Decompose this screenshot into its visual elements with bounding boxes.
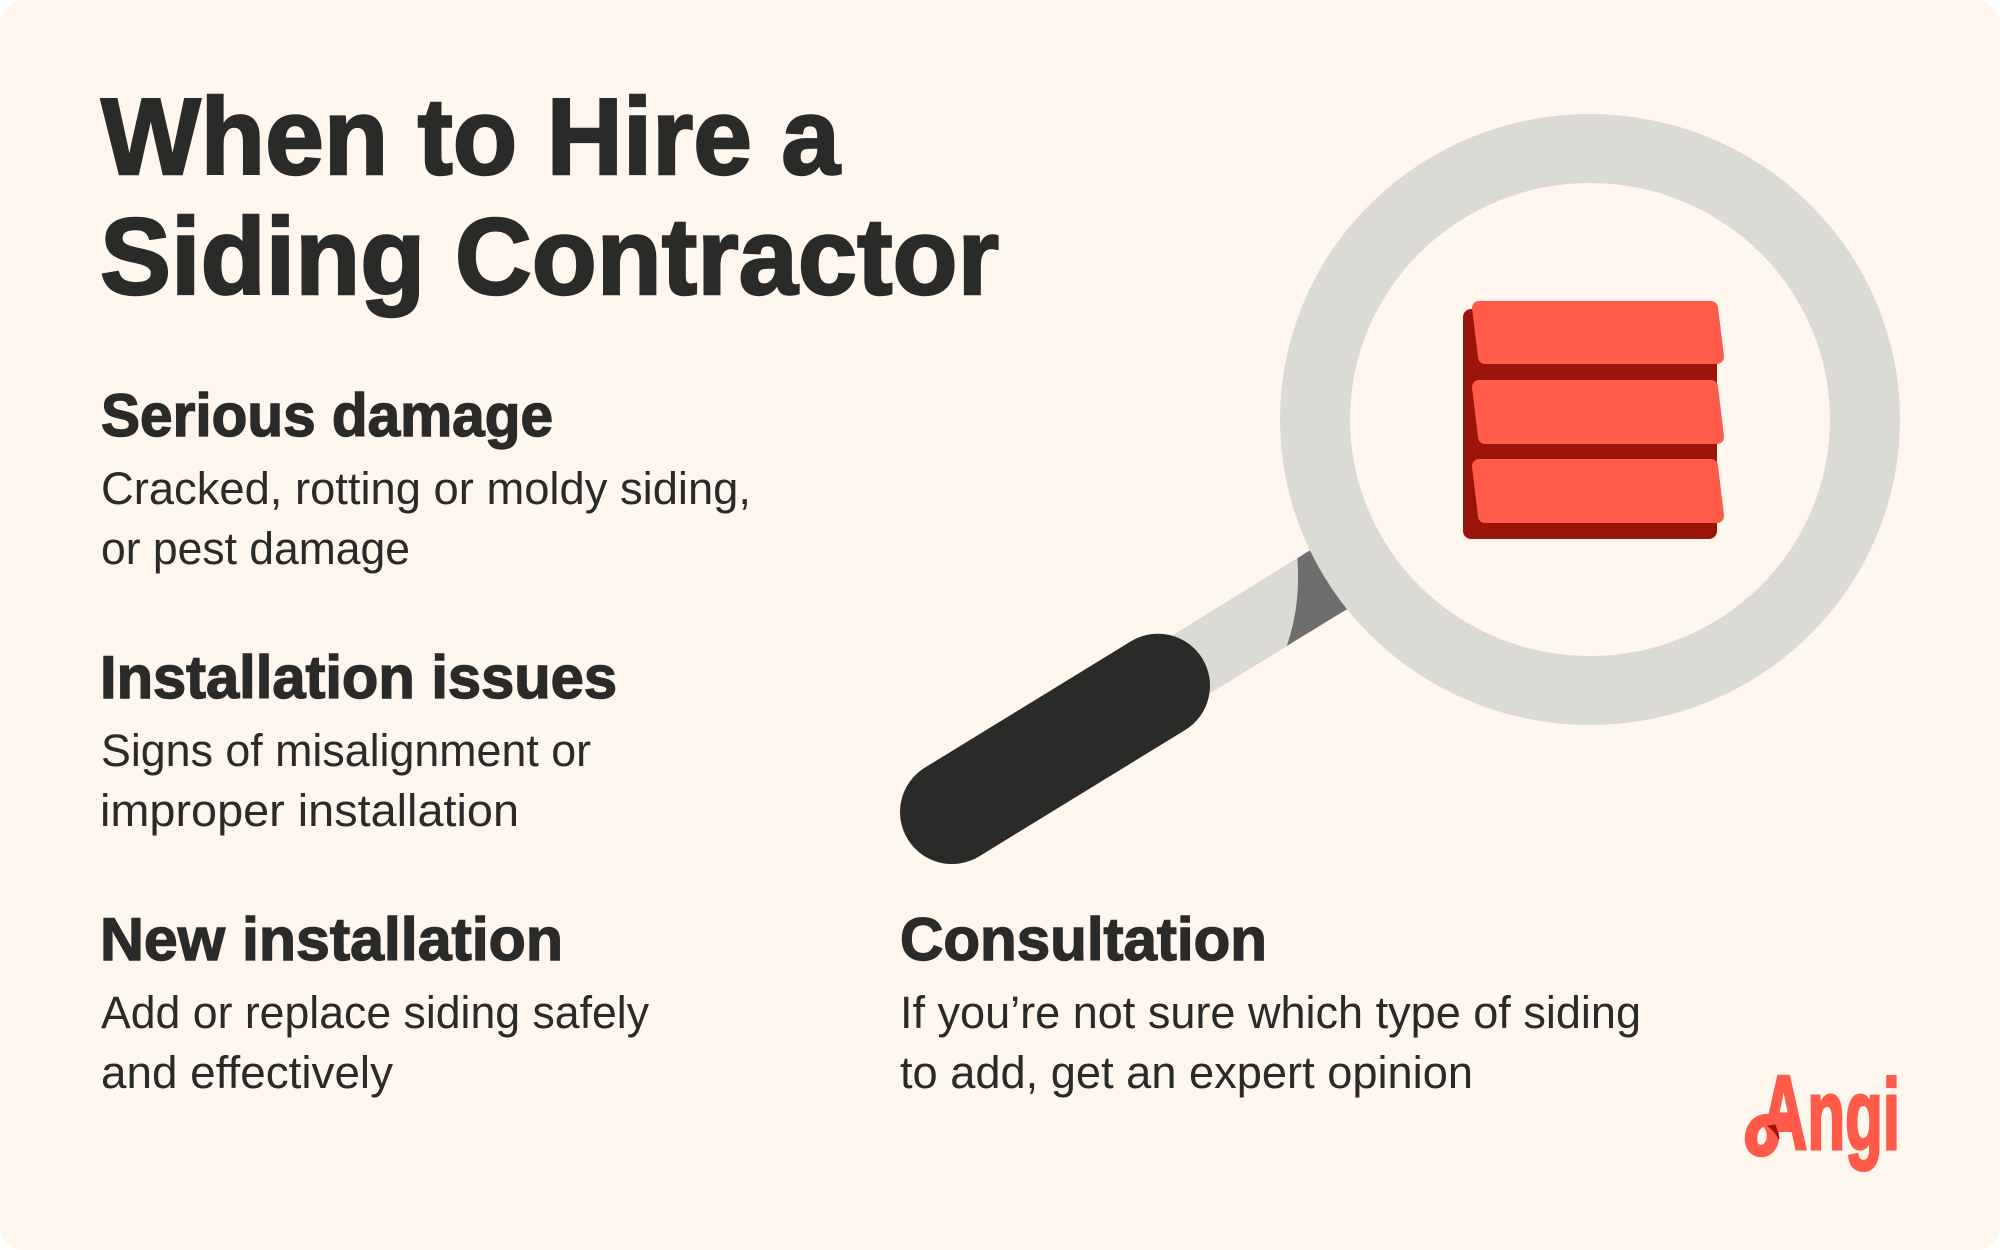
text block: new installation: New installation bbox=[100, 906, 563, 973]
text block: consultation: If you’re not sure which type of siding bbox=[900, 987, 1641, 1038]
shaft shadow bbox=[1287, 541, 1362, 646]
title: When to Hire a bbox=[101, 76, 841, 198]
text block: installation issues: Installation issues bbox=[100, 644, 617, 711]
text block: consultation bbox=[900, 906, 1641, 1098]
text block: serious damage: Serious damage bbox=[101, 382, 553, 449]
text block: serious damage bbox=[101, 382, 751, 574]
logo: Angi bbox=[1751, 1054, 1900, 1172]
text block: consultation: to add, get an expert opinion bbox=[900, 1047, 1473, 1098]
text block: new installation bbox=[100, 906, 649, 1098]
magnifier ring bbox=[1280, 114, 1900, 725]
siding board 3 bbox=[1479, 466, 1717, 516]
siding board 2 bbox=[1479, 387, 1717, 437]
magnifier shaft bbox=[1173, 541, 1362, 693]
icon: siding panels bbox=[1463, 308, 1717, 539]
icon: magnifying glass bbox=[952, 114, 1900, 812]
text block: installation issues: improper installation bbox=[100, 785, 519, 836]
text block: serious damage: Cracked, rotting or moldy siding, bbox=[101, 463, 751, 514]
text block: new installation: and effectively bbox=[101, 1047, 394, 1098]
text block: consultation: Consultation bbox=[900, 906, 1267, 973]
text block: installation issues: Signs of misalignment or bbox=[101, 725, 591, 776]
text block: new installation: Add or replace siding safely bbox=[101, 987, 649, 1038]
text block: installation issues bbox=[100, 644, 617, 836]
title bbox=[100, 76, 999, 318]
siding board 1 bbox=[1479, 308, 1717, 357]
text block: serious damage: or pest damage bbox=[101, 523, 410, 574]
magnifier handle grip bbox=[952, 686, 1158, 812]
logo: Angi: Angi bbox=[1760, 1054, 1900, 1172]
siding backing bbox=[1463, 309, 1717, 539]
title: Siding Contractor bbox=[100, 196, 999, 318]
